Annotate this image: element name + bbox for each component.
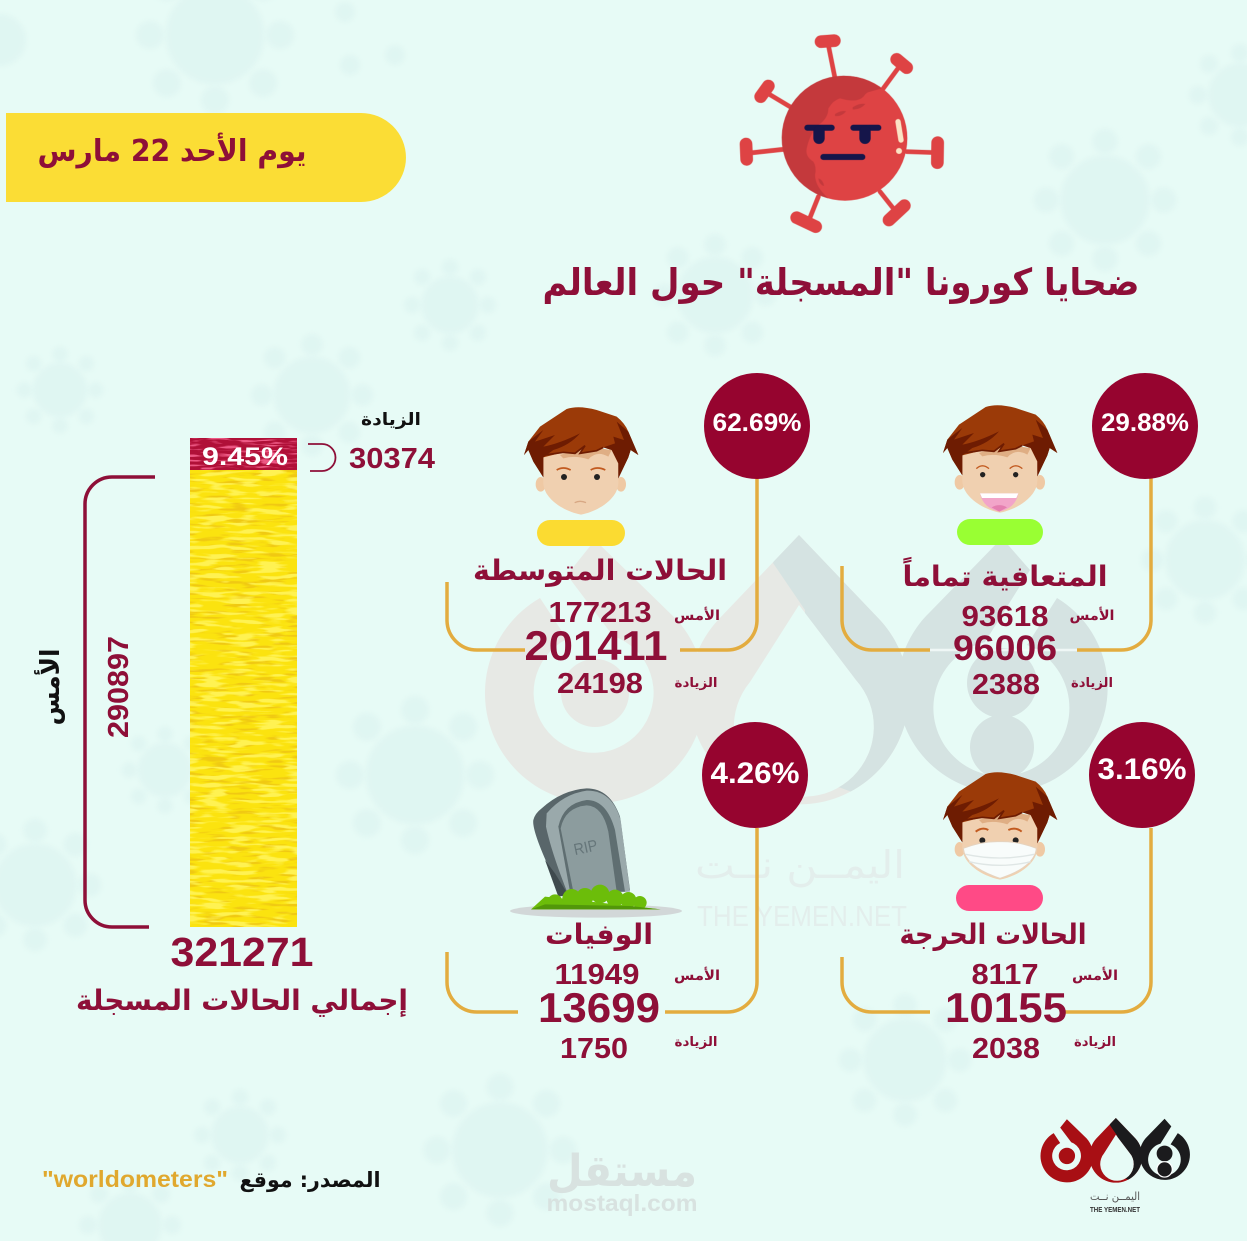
icon: neutral boy <box>524 407 638 515</box>
panel: recovered: 29.88% <box>1101 409 1189 437</box>
total: 13699 <box>538 984 660 1031</box>
logo: the yemen net: THE YEMEN.NET <box>1090 1207 1141 1214</box>
icon: gravestone <box>510 788 682 918</box>
source note: المصدر: موقع <box>240 1168 380 1192</box>
increase: 1750 <box>560 1033 628 1065</box>
percentage circle <box>1089 722 1195 828</box>
source note <box>42 1166 380 1192</box>
increase: 24198 <box>557 668 643 700</box>
panel: moderate cases: الأمس <box>674 607 720 624</box>
increase: 2038 <box>972 1033 1040 1065</box>
watermark text: THE YEMEN.NET <box>697 901 907 933</box>
heading: المتعافية تماماً <box>902 556 1108 593</box>
increase value: 30374 <box>349 443 435 475</box>
mostaql watermark <box>546 1146 698 1216</box>
increase bracket <box>308 444 336 471</box>
status pill <box>537 520 625 546</box>
connector line <box>447 828 757 1012</box>
source note: "worldometers" <box>42 1166 228 1192</box>
panel: moderate cases: الزيادة <box>674 676 718 691</box>
panel: total cases bar <box>34 410 435 1018</box>
total: 10155 <box>945 984 1067 1031</box>
yesterday: 8117 <box>972 959 1038 991</box>
logo: the yemen net: اليمــن نــت <box>1090 1190 1140 1203</box>
percentage circle <box>702 722 808 828</box>
icon: angry virus <box>746 41 938 227</box>
icon: gravestone: RIP <box>572 837 599 859</box>
yesterday value: 290897 <box>103 636 135 738</box>
panel: deaths: 4.26% <box>710 757 800 790</box>
total: 96006 <box>953 629 1057 668</box>
panel: deaths <box>447 722 808 1065</box>
connector line <box>842 478 1151 650</box>
increase label: الزيادة <box>361 410 421 430</box>
status pill <box>956 885 1043 911</box>
panel: critical cases <box>842 722 1195 1065</box>
mostaql watermark: مستقل <box>547 1146 697 1197</box>
panel: critical cases: الزيادة <box>1074 1035 1116 1050</box>
bar chart <box>190 438 297 927</box>
panel: critical cases: الأمس <box>1072 967 1118 984</box>
percentage circle <box>1092 373 1198 479</box>
panel: critical cases: 3.16% <box>1098 753 1186 786</box>
panel: recovered: الأمس <box>1070 607 1114 624</box>
total: 201411 <box>524 622 668 669</box>
connector line <box>447 478 757 650</box>
increase: 2388 <box>972 669 1040 701</box>
panel: moderate cases <box>447 373 810 700</box>
panel: deaths: الأمس <box>674 967 720 984</box>
mostaql watermark: mostaql.com <box>546 1190 698 1216</box>
yesterday label: الأمس <box>34 648 66 726</box>
heading: الحالات الحرجة <box>900 918 1086 951</box>
percentage circle <box>704 373 810 479</box>
status pill <box>957 519 1043 545</box>
watermark logo <box>485 535 1108 804</box>
yesterday: 11949 <box>554 959 640 991</box>
total value: 321271 <box>170 929 314 975</box>
panel: recovered <box>842 373 1198 701</box>
yesterday: 93618 <box>962 601 1048 633</box>
logo: the yemen net <box>1040 1118 1190 1214</box>
heading: الحالات المتوسطة <box>473 554 727 587</box>
bar percentage: 9.45% <box>202 443 288 471</box>
total label: إجمالي الحالات المسجلة <box>76 984 408 1018</box>
title: ضحايا كورونا "المسجلة" حول العالم <box>542 261 1140 304</box>
icon: boy with mask <box>943 772 1057 880</box>
connector line <box>842 828 1151 1012</box>
panel: recovered: الزيادة <box>1071 676 1113 691</box>
watermark text <box>695 843 907 933</box>
panel: moderate cases: 62.69% <box>712 409 802 437</box>
yesterday: 177213 <box>548 597 652 629</box>
date banner <box>6 113 406 202</box>
watermark text: اليمــن نــت <box>695 843 905 888</box>
panel: deaths: الزيادة <box>674 1035 718 1050</box>
date banner: يوم الأحد 22 مارس <box>38 132 307 169</box>
yesterday bracket <box>85 477 155 927</box>
icon: smiling boy <box>943 405 1057 513</box>
heading: الوفيات <box>545 918 653 951</box>
